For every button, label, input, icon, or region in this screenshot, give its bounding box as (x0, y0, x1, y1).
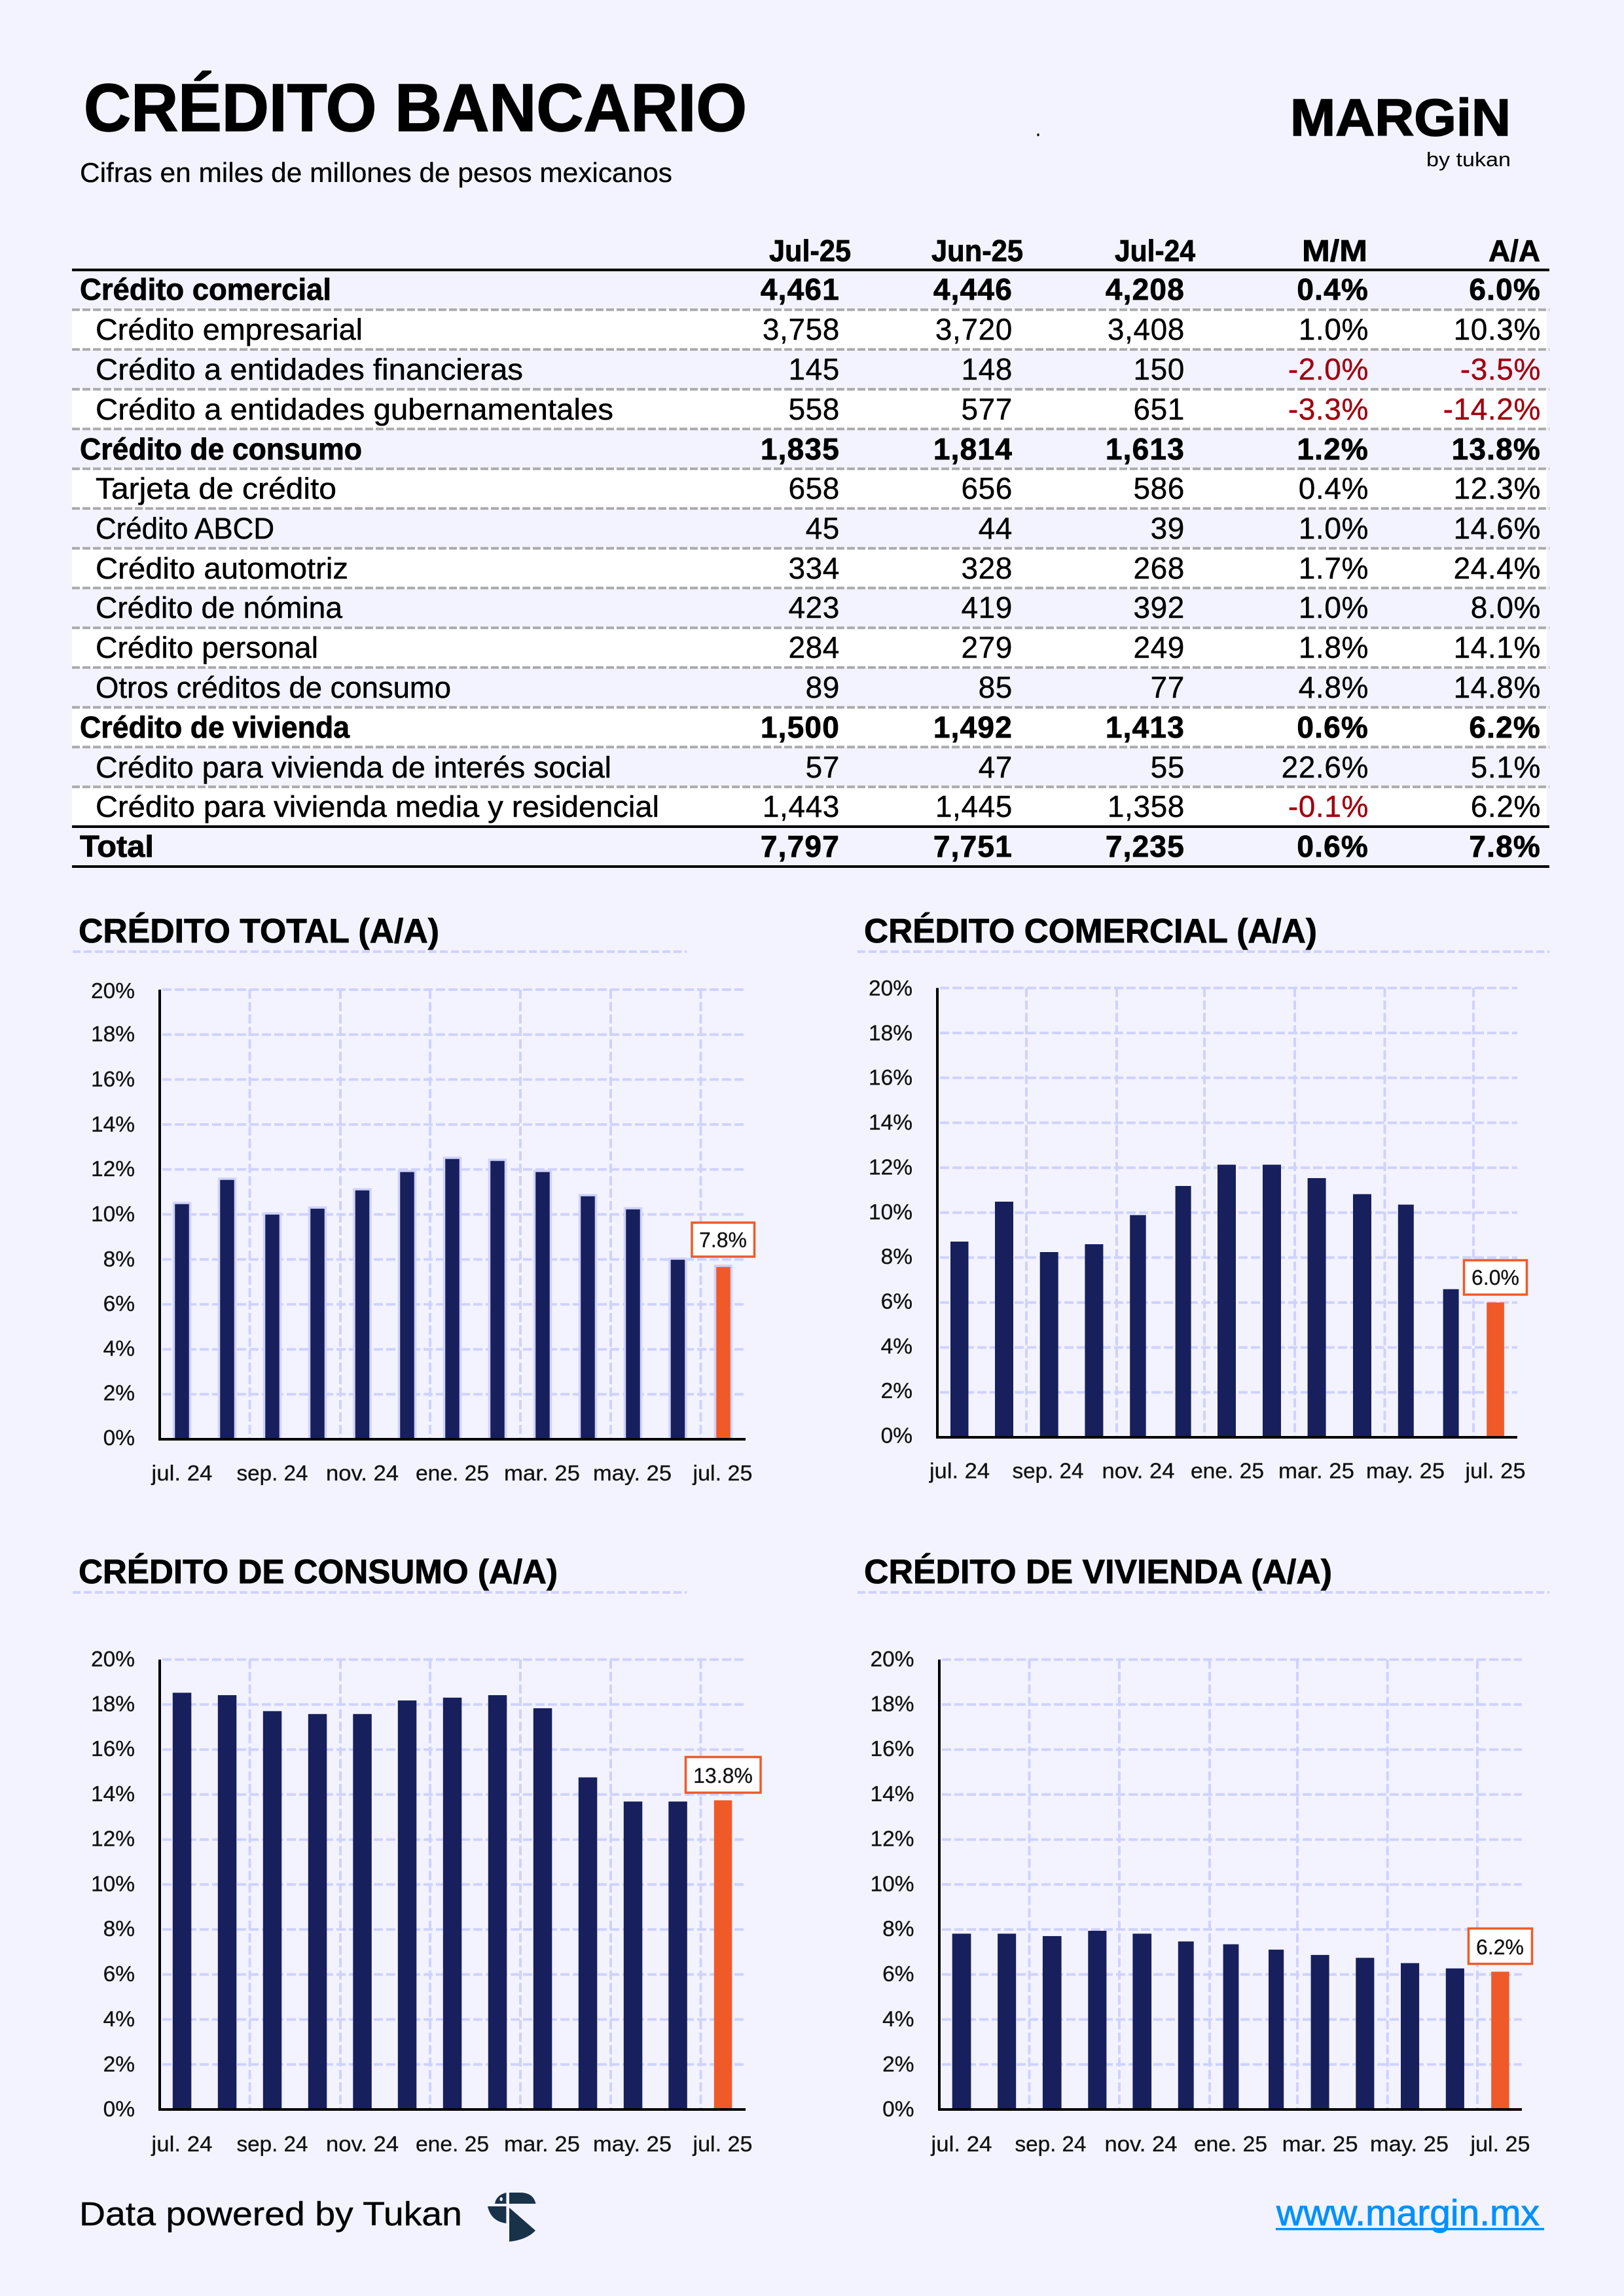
chart title: CRÉDITO DE CONSUMO (A/A) (79, 1553, 558, 1591)
table row: Tarjeta de crédito: 0.4% (1299, 471, 1369, 505)
y axis labels: 18% (91, 1693, 135, 1717)
y axis labels: 8% (881, 1245, 912, 1269)
table row: Crédito a entidades financieras: 148 (961, 352, 1013, 386)
table row: Crédito de nómina: Crédito de nómina (96, 591, 343, 624)
table row: Crédito personal: 14.1% (1454, 630, 1541, 664)
table row: Tarjeta de crédito: 658 (788, 471, 840, 505)
table row: Crédito para vivienda media y residencial: Crédito para vivienda media y residencial (96, 790, 659, 823)
y axis labels: 20% (869, 977, 912, 1001)
table row: Otros créditos de consumo: 89 (806, 670, 840, 704)
chart title: CRÉDITO COMERCIAL (A/A) (864, 912, 1317, 950)
table row: Total: 7,235 (1106, 829, 1185, 863)
chart panel: Crédito de consumo (73, 1553, 761, 2157)
table row: Crédito de nómina: 392 (1133, 590, 1185, 624)
x axis labels (151, 1462, 752, 1486)
x axis labels: mar. 25 (504, 2132, 580, 2157)
y axis labels: 20% (91, 1647, 135, 1672)
y axis labels (91, 979, 135, 1450)
x axis labels (929, 1460, 1525, 1483)
table row: Crédito empresarial: 1.0% (1299, 312, 1369, 346)
table row: Crédito para vivienda media y residencial: 1,358 (1108, 789, 1185, 823)
table row: Crédito personal: 284 (788, 630, 840, 664)
x axis labels: mar. 25 (504, 1462, 580, 1486)
table row: Crédito comercial: Crédito comercial (80, 272, 331, 306)
y axis labels: 12% (91, 1827, 135, 1852)
table row: Crédito para vivienda de interés social: 55 (1151, 750, 1185, 784)
callout: 13.8% (686, 1757, 761, 1793)
table row: Crédito para vivienda de interés social (96, 750, 1541, 784)
table row: Crédito ABCD: 45 (806, 511, 840, 545)
table row: Crédito para vivienda de interés social: 47 (979, 750, 1013, 784)
y axis labels: 14% (869, 1111, 912, 1135)
y axis labels: 4% (881, 1335, 912, 1359)
table row: Crédito a entidades financieras: 145 (788, 352, 840, 386)
table row: Crédito comercial: 4,446 (933, 272, 1013, 306)
table row: Crédito automotriz: Crédito automotriz (96, 552, 348, 585)
y axis labels: 0% (103, 1426, 135, 1450)
y axis labels: 20% (870, 1647, 914, 1672)
y axis labels: 20% (91, 979, 135, 1003)
callout: 7.8%: 7.8% (699, 1228, 747, 1251)
axes (936, 988, 1517, 1439)
table row: Crédito personal: 249 (1133, 630, 1185, 664)
x axis labels: ene. 25 (416, 1462, 489, 1486)
x axis labels: sep. 24 (1012, 1460, 1084, 1483)
table row: Crédito empresarial: 3,720 (935, 312, 1013, 346)
callout: 6.0% (1464, 1261, 1526, 1295)
table row: Crédito a entidades gubernamentales: 577 (961, 392, 1013, 426)
table row: Otros créditos de consumo: Otros créditos de consumo (96, 671, 451, 704)
y axis labels: 2% (103, 2053, 135, 2077)
table row: Crédito a entidades gubernamentales: Crédito a entidades gubernamentales (96, 393, 613, 426)
x axis labels: jul. 25 (1464, 1460, 1525, 1483)
table header: Jun-25 (931, 234, 1023, 268)
website link: www.margin.mx (1276, 2192, 1540, 2233)
y axis labels: 6% (881, 1289, 912, 1314)
y axis labels: 6% (103, 1292, 135, 1316)
table row: Crédito empresarial: 10.3% (1454, 312, 1541, 346)
table row: Total: 7,797 (761, 829, 840, 863)
chart panel: Crédito total (73, 912, 754, 1486)
table row: Crédito para vivienda media y residencial: 1,443 (763, 789, 840, 823)
callout: 7.8% (692, 1223, 754, 1257)
x axis labels (151, 2132, 752, 2157)
y axis labels: 16% (869, 1066, 912, 1090)
table row: Crédito ABCD: 1.0% (1299, 511, 1369, 545)
table row: Crédito de vivienda: 1,413 (1106, 710, 1185, 744)
y axis labels: 4% (882, 2007, 914, 2032)
chart panel: Crédito de vivienda (857, 1553, 1549, 2157)
table row: Crédito de consumo: 1,835 (761, 432, 840, 466)
table row: Crédito a entidades gubernamentales: 651 (1133, 392, 1185, 426)
table row: Total: 7.8% (1469, 829, 1541, 863)
title: CRÉDITO BANCARIO (84, 70, 747, 145)
table row: Crédito de nómina: 1.0% (1299, 590, 1369, 624)
table row: Crédito de vivienda: Crédito de vivienda (80, 710, 350, 744)
chart panel: Crédito comercial (857, 912, 1549, 1483)
table header: A/A (1489, 234, 1540, 268)
y axis labels: 10% (91, 1202, 135, 1227)
y axis labels: 16% (870, 1737, 914, 1761)
table header: Jul-24 (1115, 234, 1195, 268)
y axis labels: 0% (882, 2098, 914, 2122)
y axis labels: 12% (91, 1157, 135, 1181)
y axis labels: 14% (870, 1782, 914, 1806)
table row: Tarjeta de crédito: 12.3% (1454, 471, 1541, 505)
y axis labels: 4% (103, 1336, 135, 1361)
y axis labels: 8% (882, 1917, 914, 1941)
y axis labels: 8% (103, 1917, 135, 1941)
x axis labels: may. 25 (593, 1462, 672, 1486)
table row: Crédito ABCD: 39 (1151, 511, 1185, 545)
x axis labels: jul. 25 (1470, 2132, 1530, 2157)
table row: Crédito empresarial: Crédito empresarial (96, 313, 363, 346)
y axis labels: 16% (91, 1067, 135, 1092)
callout: 13.8%: 13.8% (693, 1764, 753, 1787)
x axis labels: ene. 25 (1191, 1460, 1264, 1483)
table row: Crédito de consumo: 1,613 (1106, 432, 1185, 466)
x axis labels: may. 25 (1366, 1460, 1445, 1483)
table row: Crédito automotriz: 334 (788, 551, 840, 585)
x axis labels: sep. 24 (237, 2132, 308, 2157)
table row: Total: Total (80, 829, 154, 863)
table row: Crédito automotriz: 1.7% (1299, 551, 1369, 585)
y axis labels: 16% (91, 1737, 135, 1761)
table row: Crédito comercial: 4,461 (761, 272, 840, 306)
table row: Crédito a entidades gubernamentales: -14.2% (1443, 392, 1541, 426)
y axis labels: 6% (882, 1962, 914, 1986)
table header: Jul-25 (769, 234, 851, 268)
y axis labels (869, 977, 912, 1448)
table row: Crédito ABCD: 44 (979, 511, 1013, 545)
y axis labels: 12% (870, 1827, 914, 1852)
table row: Crédito comercial: 4,208 (1106, 272, 1185, 306)
table row: Crédito empresarial (72, 310, 1547, 350)
table row: Crédito de consumo (80, 432, 1541, 466)
table row: Crédito de consumo: 1,814 (933, 432, 1013, 466)
y axis labels: 14% (91, 1113, 135, 1137)
table row: Crédito personal: Crédito personal (96, 631, 318, 664)
bars (174, 1158, 732, 1439)
x axis labels: sep. 24 (1015, 2132, 1087, 2157)
x axis labels: nov. 24 (1105, 2132, 1177, 2157)
table row: Crédito para vivienda de interés social: 57 (806, 750, 840, 784)
bars (952, 1931, 1509, 2109)
table row: Crédito a entidades financieras: -2.0% (1288, 352, 1369, 386)
y axis labels (870, 1647, 914, 2122)
table row: Otros créditos de consumo: 85 (979, 670, 1013, 704)
x axis labels: nov. 24 (1102, 1460, 1174, 1483)
x axis labels: ene. 25 (416, 2132, 489, 2157)
table row: Crédito automotriz: 24.4% (1454, 551, 1541, 585)
table row: Crédito de vivienda: 1,492 (933, 710, 1013, 744)
table header: M/M (1302, 234, 1367, 268)
table row: Crédito automotriz (72, 548, 1547, 588)
table row: Crédito personal: 279 (961, 630, 1013, 664)
y axis labels: 2% (881, 1379, 912, 1403)
bars (950, 1165, 1504, 1437)
table row: Crédito para vivienda media y residencial: 1,445 (935, 789, 1013, 823)
table row: Crédito para vivienda de interés social: 22.6% (1282, 750, 1369, 784)
table row: Crédito para vivienda media y residencial (72, 787, 1547, 827)
table row: Crédito de nómina: 423 (788, 590, 840, 624)
table row: Crédito personal (72, 628, 1547, 668)
callout: 6.2%: 6.2% (1476, 1935, 1524, 1959)
table row: Crédito ABCD (96, 511, 1541, 545)
logo: Margin by tukan: MARGiN (1290, 88, 1511, 147)
table row: Crédito personal: 1.8% (1299, 630, 1369, 664)
y axis labels: 18% (869, 1021, 912, 1045)
table row: Crédito a entidades financieras (96, 352, 1541, 386)
table row: Crédito de nómina: 419 (961, 590, 1013, 624)
table row: Crédito para vivienda de interés social: 5.1% (1471, 750, 1541, 784)
table row: Crédito automotriz: 328 (961, 551, 1013, 585)
table row: Crédito a entidades financieras: Crédito a entidades financieras (96, 353, 523, 386)
callout: 6.2% (1469, 1928, 1532, 1964)
table row: Crédito de vivienda: 1,500 (761, 710, 840, 744)
table row: Tarjeta de crédito: 656 (961, 471, 1013, 505)
y axis labels: 14% (91, 1782, 135, 1806)
table row: Crédito comercial (80, 272, 1541, 306)
table row: Crédito a entidades financieras: -3.5% (1460, 352, 1541, 386)
table row: Crédito de vivienda (72, 708, 1547, 747)
y axis labels: 18% (91, 1022, 135, 1047)
table row: Crédito ABCD: 14.6% (1454, 511, 1541, 545)
table row: Crédito automotriz: 268 (1133, 551, 1185, 585)
y axis labels: 0% (103, 2098, 135, 2122)
y axis labels: 8% (103, 1247, 135, 1272)
table row: Tarjeta de crédito: Tarjeta de crédito (96, 472, 336, 505)
y axis labels: 18% (870, 1693, 914, 1717)
table row: Crédito para vivienda de interés social: Crédito para vivienda de interés social (96, 751, 611, 784)
table row: Crédito empresarial: 3,408 (1108, 312, 1185, 346)
y axis labels: 2% (103, 1382, 135, 1406)
footer credit: Data powered by Tukan (79, 2195, 462, 2233)
table row: Crédito empresarial: 3,758 (763, 312, 840, 346)
table row: Crédito a entidades gubernamentales (72, 389, 1547, 429)
table row: Crédito ABCD: Crédito ABCD (96, 512, 274, 545)
subtitle: Cifras en miles de millones de pesos mexicanos (80, 157, 672, 188)
table row: Total: 7,751 (933, 829, 1013, 863)
y axis labels: 10% (869, 1200, 912, 1225)
y axis labels: 12% (869, 1155, 912, 1179)
table row: Tarjeta de crédito: 586 (1133, 471, 1185, 505)
y axis labels (91, 1647, 135, 2122)
x axis labels: jul. 24 (929, 1460, 990, 1483)
table row: Crédito de nómina: 8.0% (1471, 590, 1541, 624)
x axis labels: may. 25 (1370, 2132, 1449, 2157)
callout: 6.0%: 6.0% (1471, 1266, 1519, 1289)
y axis labels: 10% (91, 1872, 135, 1896)
table row: Otros créditos de consumo (96, 670, 1541, 704)
table row: Total: 0.6% (1297, 829, 1369, 863)
table: crédito bancario (72, 234, 1549, 868)
bars (173, 1693, 732, 2109)
y axis labels: 6% (103, 1962, 135, 1986)
logo: Margin by tukan: by tukan (1426, 148, 1511, 171)
table row: Crédito a entidades financieras: 150 (1133, 352, 1185, 386)
axes (158, 990, 746, 1441)
table row: Crédito de nómina (96, 590, 1541, 624)
logo: Margin by tukan (1290, 88, 1511, 171)
table row: Otros créditos de consumo: 4.8% (1299, 670, 1369, 704)
x axis labels: mar. 25 (1278, 1460, 1354, 1483)
table row: Crédito de consumo: 13.8% (1452, 432, 1541, 466)
table row: Otros créditos de consumo: 14.8% (1454, 670, 1541, 704)
chart title: CRÉDITO DE VIVIENDA (A/A) (864, 1553, 1332, 1591)
y axis labels: 4% (103, 2007, 135, 2032)
table header (769, 234, 1540, 268)
table row: Otros créditos de consumo: 77 (1151, 670, 1185, 704)
table row: Crédito de vivienda: 0.6% (1297, 710, 1369, 744)
table row: Tarjeta de crédito (72, 469, 1547, 509)
axes (938, 1660, 1522, 2111)
x axis labels: jul. 25 (692, 1462, 753, 1486)
table row: Crédito de vivienda: 6.2% (1469, 710, 1541, 744)
x axis labels: may. 25 (593, 2132, 672, 2157)
table row: Crédito de consumo: Crédito de consumo (80, 432, 362, 466)
x axis labels: mar. 25 (1282, 2132, 1358, 2157)
table row: Total (80, 829, 1541, 863)
table row: Crédito para vivienda media y residencial: -0.1% (1288, 789, 1369, 823)
table row: Crédito comercial: 6.0% (1469, 272, 1541, 306)
y axis labels: 0% (881, 1424, 912, 1448)
table row: Crédito comercial: 0.4% (1297, 272, 1369, 306)
icon: tukan logo (488, 2193, 535, 2242)
table row: Crédito a entidades gubernamentales: 558 (788, 392, 840, 426)
y axis labels: 2% (882, 2053, 914, 2077)
y axis labels: 10% (870, 1872, 914, 1896)
x axis labels: jul. 24 (930, 2132, 992, 2157)
table row: Crédito a entidades gubernamentales: -3.3% (1288, 392, 1369, 426)
x axis labels (930, 2132, 1530, 2157)
x axis labels: ene. 25 (1194, 2132, 1267, 2157)
x axis labels: jul. 25 (692, 2132, 753, 2157)
x axis labels: sep. 24 (237, 1462, 308, 1486)
x axis labels: nov. 24 (326, 2132, 399, 2157)
table row: Crédito para vivienda media y residencial: 6.2% (1471, 789, 1541, 823)
x axis labels: jul. 24 (151, 1462, 212, 1486)
chart title: CRÉDITO TOTAL (A/A) (79, 912, 439, 950)
axes (158, 1660, 746, 2111)
x axis labels: jul. 24 (151, 2132, 212, 2157)
table row: Crédito de consumo: 1.2% (1297, 432, 1369, 466)
x axis labels: nov. 24 (326, 1462, 399, 1486)
